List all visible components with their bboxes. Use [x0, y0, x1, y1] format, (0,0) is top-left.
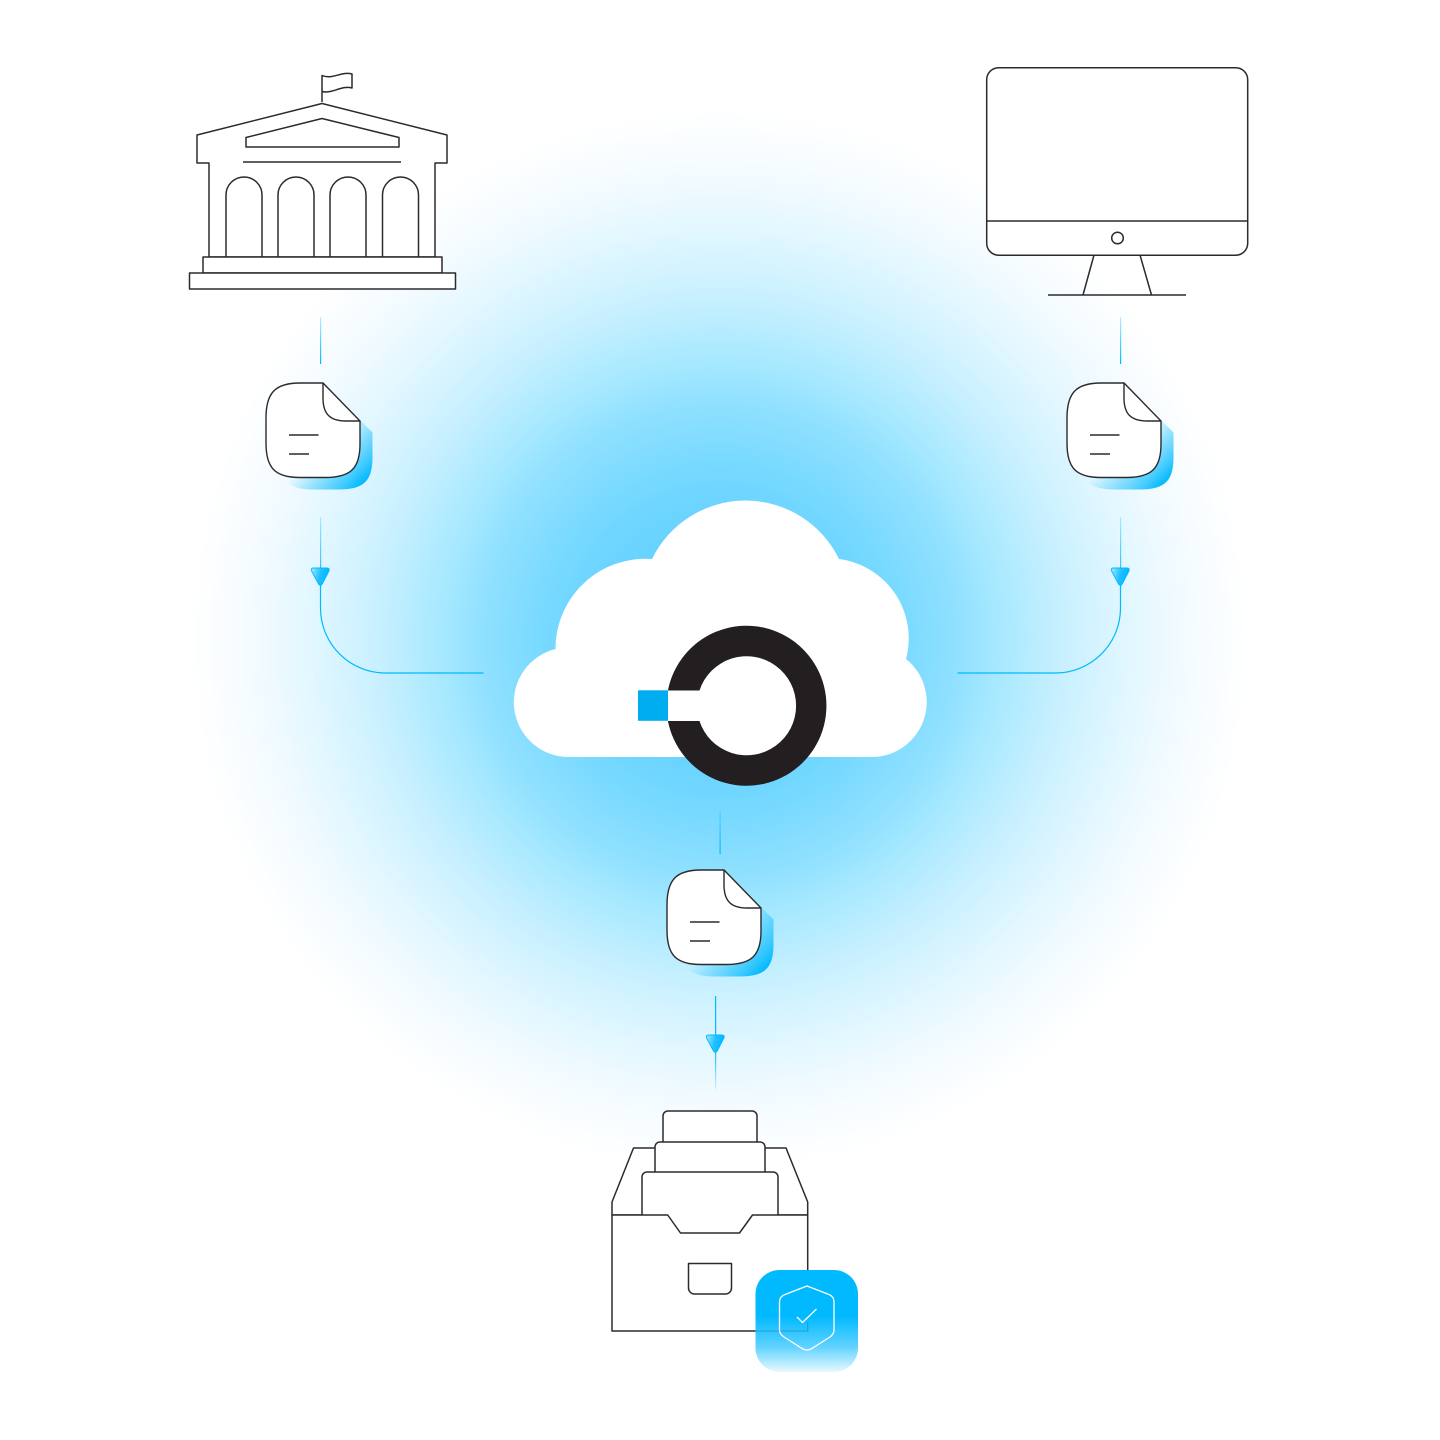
- shield outline: [780, 1286, 834, 1350]
- connector: monitor to document: [1120, 317, 1121, 364]
- file card: middle: [655, 1142, 765, 1172]
- box handle: [688, 1264, 732, 1294]
- connector: right document to cloud: [958, 517, 1129, 673]
- connector: document to archive box: [706, 996, 724, 1091]
- icon: government building: [190, 73, 456, 289]
- connector: building to document: [320, 317, 321, 364]
- logo ring: [668, 626, 826, 786]
- icon: desktop monitor: [987, 68, 1248, 295]
- icon: archive box with files: [612, 1111, 808, 1331]
- document: right: [1067, 383, 1174, 490]
- box front: [612, 1215, 808, 1331]
- cloud with logo: [514, 501, 927, 786]
- file card: front: [642, 1172, 778, 1235]
- connector: left document to cloud: [311, 517, 484, 673]
- arrow: right: [1111, 568, 1129, 585]
- connector: cloud to document: [720, 811, 721, 854]
- arrow: bottom: [706, 1035, 724, 1052]
- arrow: left: [311, 568, 329, 585]
- file card: back: [663, 1111, 757, 1142]
- document: left: [266, 383, 372, 490]
- badge: security shield: [756, 1270, 858, 1372]
- check mark: [797, 1309, 816, 1322]
- cloud shape: [514, 501, 927, 757]
- logo square: [638, 690, 668, 721]
- box edge seen through badge: [756, 1322, 808, 1331]
- document: bottom: [667, 870, 774, 976]
